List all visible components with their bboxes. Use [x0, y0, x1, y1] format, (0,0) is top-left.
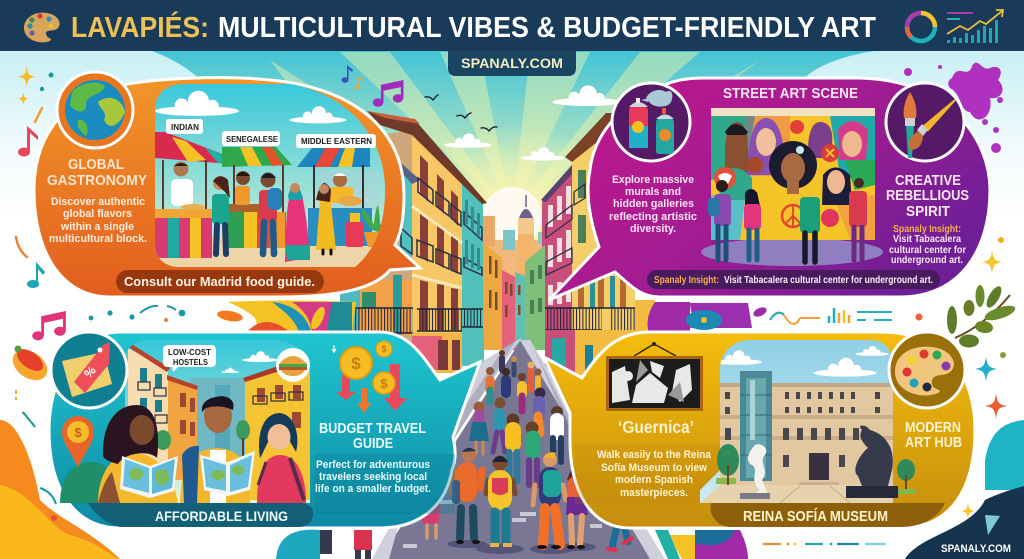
- heading: Creative Rebellious Spirit: CREATIVE: [895, 172, 961, 189]
- heading: Modern Art Hub: ART HUB: [905, 434, 962, 451]
- text: budget travel description: life on a smaller budget.: [315, 483, 431, 495]
- icon: falling coins: [332, 341, 407, 413]
- balconies left facade: [401, 178, 482, 275]
- icon: spray cans: [612, 83, 690, 161]
- icon: paint splatter: [904, 63, 1003, 153]
- callout: low-cost hostels: HOSTELS: [173, 357, 208, 367]
- icon: falling coins: $: [351, 354, 361, 373]
- label: Indian: INDIAN: [171, 122, 199, 132]
- text: Reina Sofia description: modern Spanish: [615, 474, 693, 486]
- backpackers illustration: [125, 340, 315, 505]
- text: Reina Sofia description: [597, 449, 712, 499]
- footer label: SPANALY.COM: [941, 543, 1011, 555]
- distant town and church tower: [483, 195, 546, 350]
- title: LAVAPIÉS:: [71, 10, 209, 44]
- heading: Modern Art Hub: [905, 419, 962, 451]
- callout: Madrid food guide: [116, 270, 324, 293]
- text: Reina Sofia description: masterpieces.: [620, 487, 688, 499]
- text: gastronomy description: global flavors: [63, 208, 132, 220]
- text: street art description: diversity.: [630, 223, 676, 235]
- bottom corner paint shapes: [0, 420, 1024, 559]
- street with pedestrians: [372, 337, 665, 559]
- callout: Reina Sofia Museum: [710, 503, 945, 527]
- text: budget travel description: [315, 459, 431, 495]
- stall: Indian: [155, 132, 222, 258]
- icon: growth chart: [947, 10, 1003, 43]
- bush and map pin: $: [74, 425, 82, 440]
- label: Senegalese: SENEGALESE: [226, 134, 278, 144]
- text: street art description: murals and: [625, 186, 681, 198]
- maps: [120, 456, 178, 498]
- text: gastronomy description: multicultural block.: [49, 233, 147, 245]
- text: budget travel description: travelers seeking local: [319, 471, 427, 483]
- callout: Reina Sofia Museum: REINA SOFÍA MUSEUM: [743, 508, 888, 525]
- mural viewers: [708, 178, 867, 262]
- icon: header palette: [24, 13, 60, 42]
- text: Spanaly insight side note: underground art.: [891, 255, 963, 266]
- callout: low-cost hostels: [163, 345, 216, 372]
- heading: Creative Rebellious Spirit: REBELLIOUS: [886, 187, 969, 204]
- callout: Spanaly insight pill: Visit Tabacalera cultural center for underground art.: [724, 275, 933, 286]
- heading: Creative Rebellious Spirit: [886, 172, 969, 220]
- text: budget travel description: Perfect for adventurous: [316, 459, 430, 471]
- heading: Street Art Scene: STREET ART SCENE: [723, 86, 858, 102]
- heading: Global Gastronomy: GLOBAL: [68, 156, 124, 173]
- text: gastronomy description: [49, 196, 147, 245]
- label: Indian: [166, 119, 203, 134]
- label: Middle Eastern: [296, 134, 376, 148]
- label: Middle Eastern: MIDDLE EASTERN: [301, 136, 372, 146]
- panel: global gastronomy: [34, 72, 420, 297]
- icon: globe: [57, 72, 133, 148]
- brand tab: SPANALY.COM: [461, 55, 563, 71]
- stall: Senegalese: [222, 147, 292, 248]
- label: Senegalese: [222, 131, 280, 146]
- text: Spanaly insight side note: [889, 224, 966, 266]
- icon: donut chart: [907, 13, 935, 41]
- icon: olive branch: [947, 284, 1017, 348]
- heading: Budget Travel Guide: GUIDE: [353, 435, 393, 452]
- small pedestrians far: [486, 350, 542, 411]
- food crowd: [212, 172, 336, 262]
- callout: affordable living: AFFORDABLE LIVING: [155, 508, 288, 524]
- colourful paint blobs behind bubbles: [216, 300, 923, 335]
- icon: falling coins: $: [380, 376, 388, 391]
- heading: Global Gastronomy: GASTRONOMY: [47, 172, 147, 189]
- icon: discount tag: %: [81, 363, 99, 381]
- windows left facade: [420, 155, 458, 330]
- panel: street art scene: [549, 78, 990, 300]
- panel: affordable living: [49, 332, 480, 528]
- mid pedestrians: [469, 388, 563, 485]
- callout: Spanaly insight pill: [647, 270, 940, 289]
- street buildings left: [340, 111, 525, 373]
- text: Spanaly insight side note: Visit Tabacalera: [893, 234, 961, 245]
- text: gastronomy description: within a single: [60, 221, 134, 233]
- street buildings right: [525, 113, 640, 375]
- mural illustration: [701, 108, 883, 266]
- garden trees and sculptures: [717, 426, 915, 499]
- icon: discount tag: [51, 332, 127, 408]
- mural faces: [714, 118, 875, 240]
- text: Spanaly insight side note: Spanaly Insight:: [893, 224, 961, 235]
- text: street art description: Explore massive: [612, 174, 694, 186]
- text: Spanaly insight side note: cultural center for: [889, 245, 966, 256]
- header bar: [0, 0, 1024, 51]
- title: MULTICULTURAL VIBES & BUDGET-FRIENDLY ART: [218, 12, 876, 44]
- market illustration: [150, 80, 392, 270]
- icon: paint brushes: [886, 83, 964, 161]
- text: Reina Sofia description: Walk easily to the Reina: [597, 449, 712, 461]
- callout: low-cost hostels: LOW-COST: [168, 347, 212, 357]
- heading: Modern Art Hub: MODERN: [905, 419, 961, 436]
- callout: Madrid food guide: Consult our Madrid food guide.: [124, 274, 315, 289]
- museum illustration: [700, 340, 895, 505]
- text: Reina Sofia description: Sofía Museum to view: [601, 462, 707, 474]
- heading: Guernica: ‘Guernica’: [618, 417, 694, 437]
- bush and map pin: [60, 416, 125, 503]
- heading: Global Gastronomy: [47, 156, 147, 189]
- text: street art description: hidden galleries: [613, 198, 694, 210]
- travellers: [98, 396, 306, 503]
- text: gastronomy description: Discover authentic: [51, 196, 145, 208]
- brand tab: [448, 51, 576, 76]
- stall: Middle Eastern: [297, 148, 372, 246]
- artwork: Guernica painting: [606, 342, 703, 411]
- callout: Spanaly insight pill: Spanaly Insight:: [654, 275, 719, 286]
- text: street art description: reflecting artistic: [609, 211, 697, 223]
- callout: affordable living: [88, 503, 313, 527]
- foreground pedestrians: [420, 448, 632, 554]
- icon: taco: [7, 343, 53, 387]
- icon: artist palette: [889, 332, 965, 408]
- heading: Budget Travel Guide: [319, 420, 426, 452]
- heading: Creative Rebellious Spirit: SPIRIT: [906, 203, 950, 220]
- icon: burger: [276, 348, 310, 382]
- icon: falling coins: $: [381, 344, 387, 354]
- text: street art description: [609, 174, 697, 235]
- heading: Budget Travel Guide: BUDGET TRAVEL: [319, 420, 426, 437]
- panel: modern art hub: [544, 332, 975, 528]
